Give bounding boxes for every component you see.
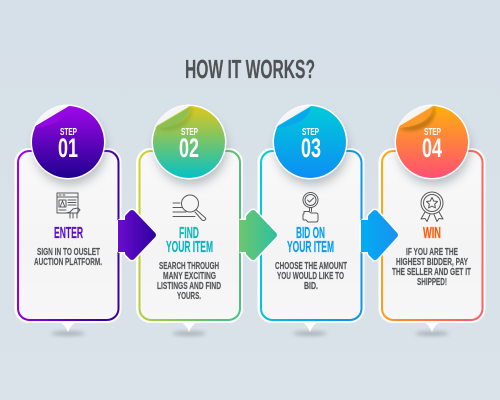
badge: step 3	[272, 104, 348, 185]
label: step 04	[422, 127, 442, 163]
label: step 02: STEP	[181, 127, 198, 138]
text: step 3 description	[275, 260, 347, 292]
text: step 4 description: SHIPPED!	[417, 276, 447, 288]
icon: magnifying glass	[173, 195, 206, 220]
heading: bid on your item: BID ON	[296, 225, 325, 242]
label: step 03: STEP	[302, 127, 319, 138]
heading: bid on your item	[287, 225, 334, 256]
text: step 3 description: YOU WOULD LIKE TO	[277, 270, 344, 282]
heading: bid on your item: YOUR ITEM	[287, 239, 334, 256]
card: step 3	[260, 150, 362, 320]
text: step 2 description: YOURS.	[177, 290, 201, 302]
label: step 04: 04	[422, 133, 442, 163]
label: step 01: STEP	[60, 127, 77, 138]
card: step 4	[381, 150, 483, 320]
pointer and shadow: step 4	[415, 321, 449, 336]
text: step 2 description	[157, 260, 221, 302]
arrow: step 1 to 2	[118, 213, 153, 257]
label: step 01: 01	[58, 133, 78, 163]
text: step 1 description: SIGN IN TO OUSLET	[37, 246, 100, 258]
panel: step 4 win	[381, 150, 483, 336]
panel: step 1 enter	[17, 150, 119, 336]
arrow: step 3 to 4	[361, 213, 395, 257]
text: step 2 description: MANY EXCITING	[163, 270, 216, 282]
heading: win: WIN	[423, 225, 441, 242]
text: step 4 description: IF YOU ARE THE	[406, 246, 458, 258]
pointer and shadow: step 1	[51, 321, 85, 336]
pointer and shadow: step 3	[293, 321, 327, 336]
text: step 2 description: SEARCH THROUGH	[159, 260, 219, 272]
text: step 3 description: BID.	[304, 280, 318, 292]
text: step 1 description: AUCTION PLATFORM.	[34, 256, 102, 268]
badge: step 4	[394, 104, 470, 185]
heading: find your item: YOUR ITEM	[166, 239, 213, 256]
card: step 2	[138, 150, 240, 320]
text: step 1 description	[34, 246, 102, 268]
icon: award rosette	[421, 192, 443, 222]
label: step 04: STEP	[424, 127, 441, 138]
badge: step 2	[152, 104, 227, 185]
panel: step 3 bid on your item	[260, 150, 362, 336]
title: HOW IT WORKS?	[185, 54, 315, 84]
label: step 02	[179, 127, 199, 163]
heading: find your item	[166, 225, 213, 256]
icon: hand holding bid paddle	[303, 192, 318, 222]
arrow: step 2 to 3	[239, 213, 274, 257]
badge: step 1	[30, 104, 106, 185]
label: step 02: 02	[179, 133, 199, 163]
heading: find your item: FIND	[179, 225, 199, 242]
label: step 03: 03	[301, 133, 321, 163]
label: step 01	[58, 127, 78, 163]
label: step 03	[301, 127, 321, 163]
text: step 4 description	[392, 246, 471, 288]
heading: enter: ENTER	[54, 225, 83, 242]
text: step 3 description: CHOOSE THE AMOUNT	[275, 260, 347, 272]
card: step 1	[17, 150, 119, 320]
pointer and shadow: step 2	[172, 321, 206, 336]
icon: contract and signing hand	[57, 193, 80, 218]
text: step 2 description: LISTINGS AND FIND	[157, 280, 221, 292]
panel: step 2 find your item	[138, 150, 240, 336]
